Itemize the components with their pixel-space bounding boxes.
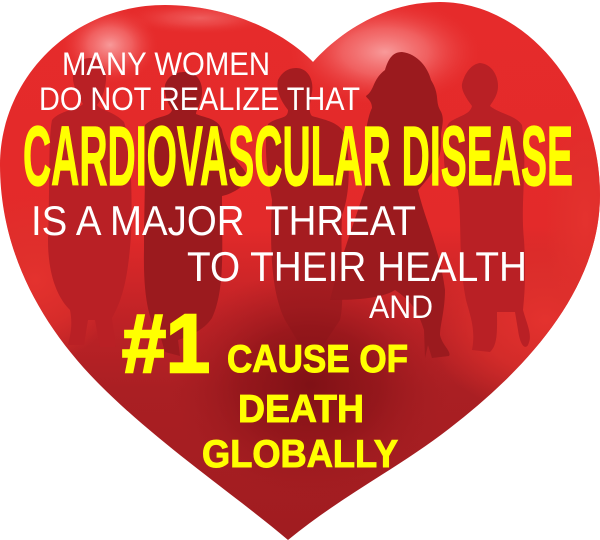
text: is a major threat to their health and: [31, 197, 527, 325]
callout: #1 cause of death globally: DEATH: [238, 388, 364, 431]
callout: #1 cause of death globally: GLOBALLY: [202, 433, 398, 476]
silhouette: woman 1: [48, 58, 132, 347]
callout: #1 cause of death globally: CAUSE OF: [227, 338, 408, 381]
callout: #1 cause of death globally: [122, 297, 408, 476]
callout: #1 cause of death globally: #1: [122, 297, 210, 390]
silhouette: person 3: [266, 68, 349, 350]
text: many women do not realize that: [39, 46, 360, 117]
silhouette: woman 4: [330, 52, 450, 358]
silhouette: woman 5: [444, 63, 530, 352]
text: is a major threat to their health and: IS A MAJOR THREAT: [31, 197, 416, 244]
text: is a major threat to their health and: AND: [369, 289, 433, 325]
text: many women do not realize that: MANY WOMEN: [62, 46, 270, 82]
silhouette: man 2: [144, 72, 248, 356]
text: many women do not realize that: DO NOT REALIZE THAT: [39, 81, 360, 117]
text: is a major threat to their health and: TO THEIR HEALTH: [187, 243, 527, 290]
